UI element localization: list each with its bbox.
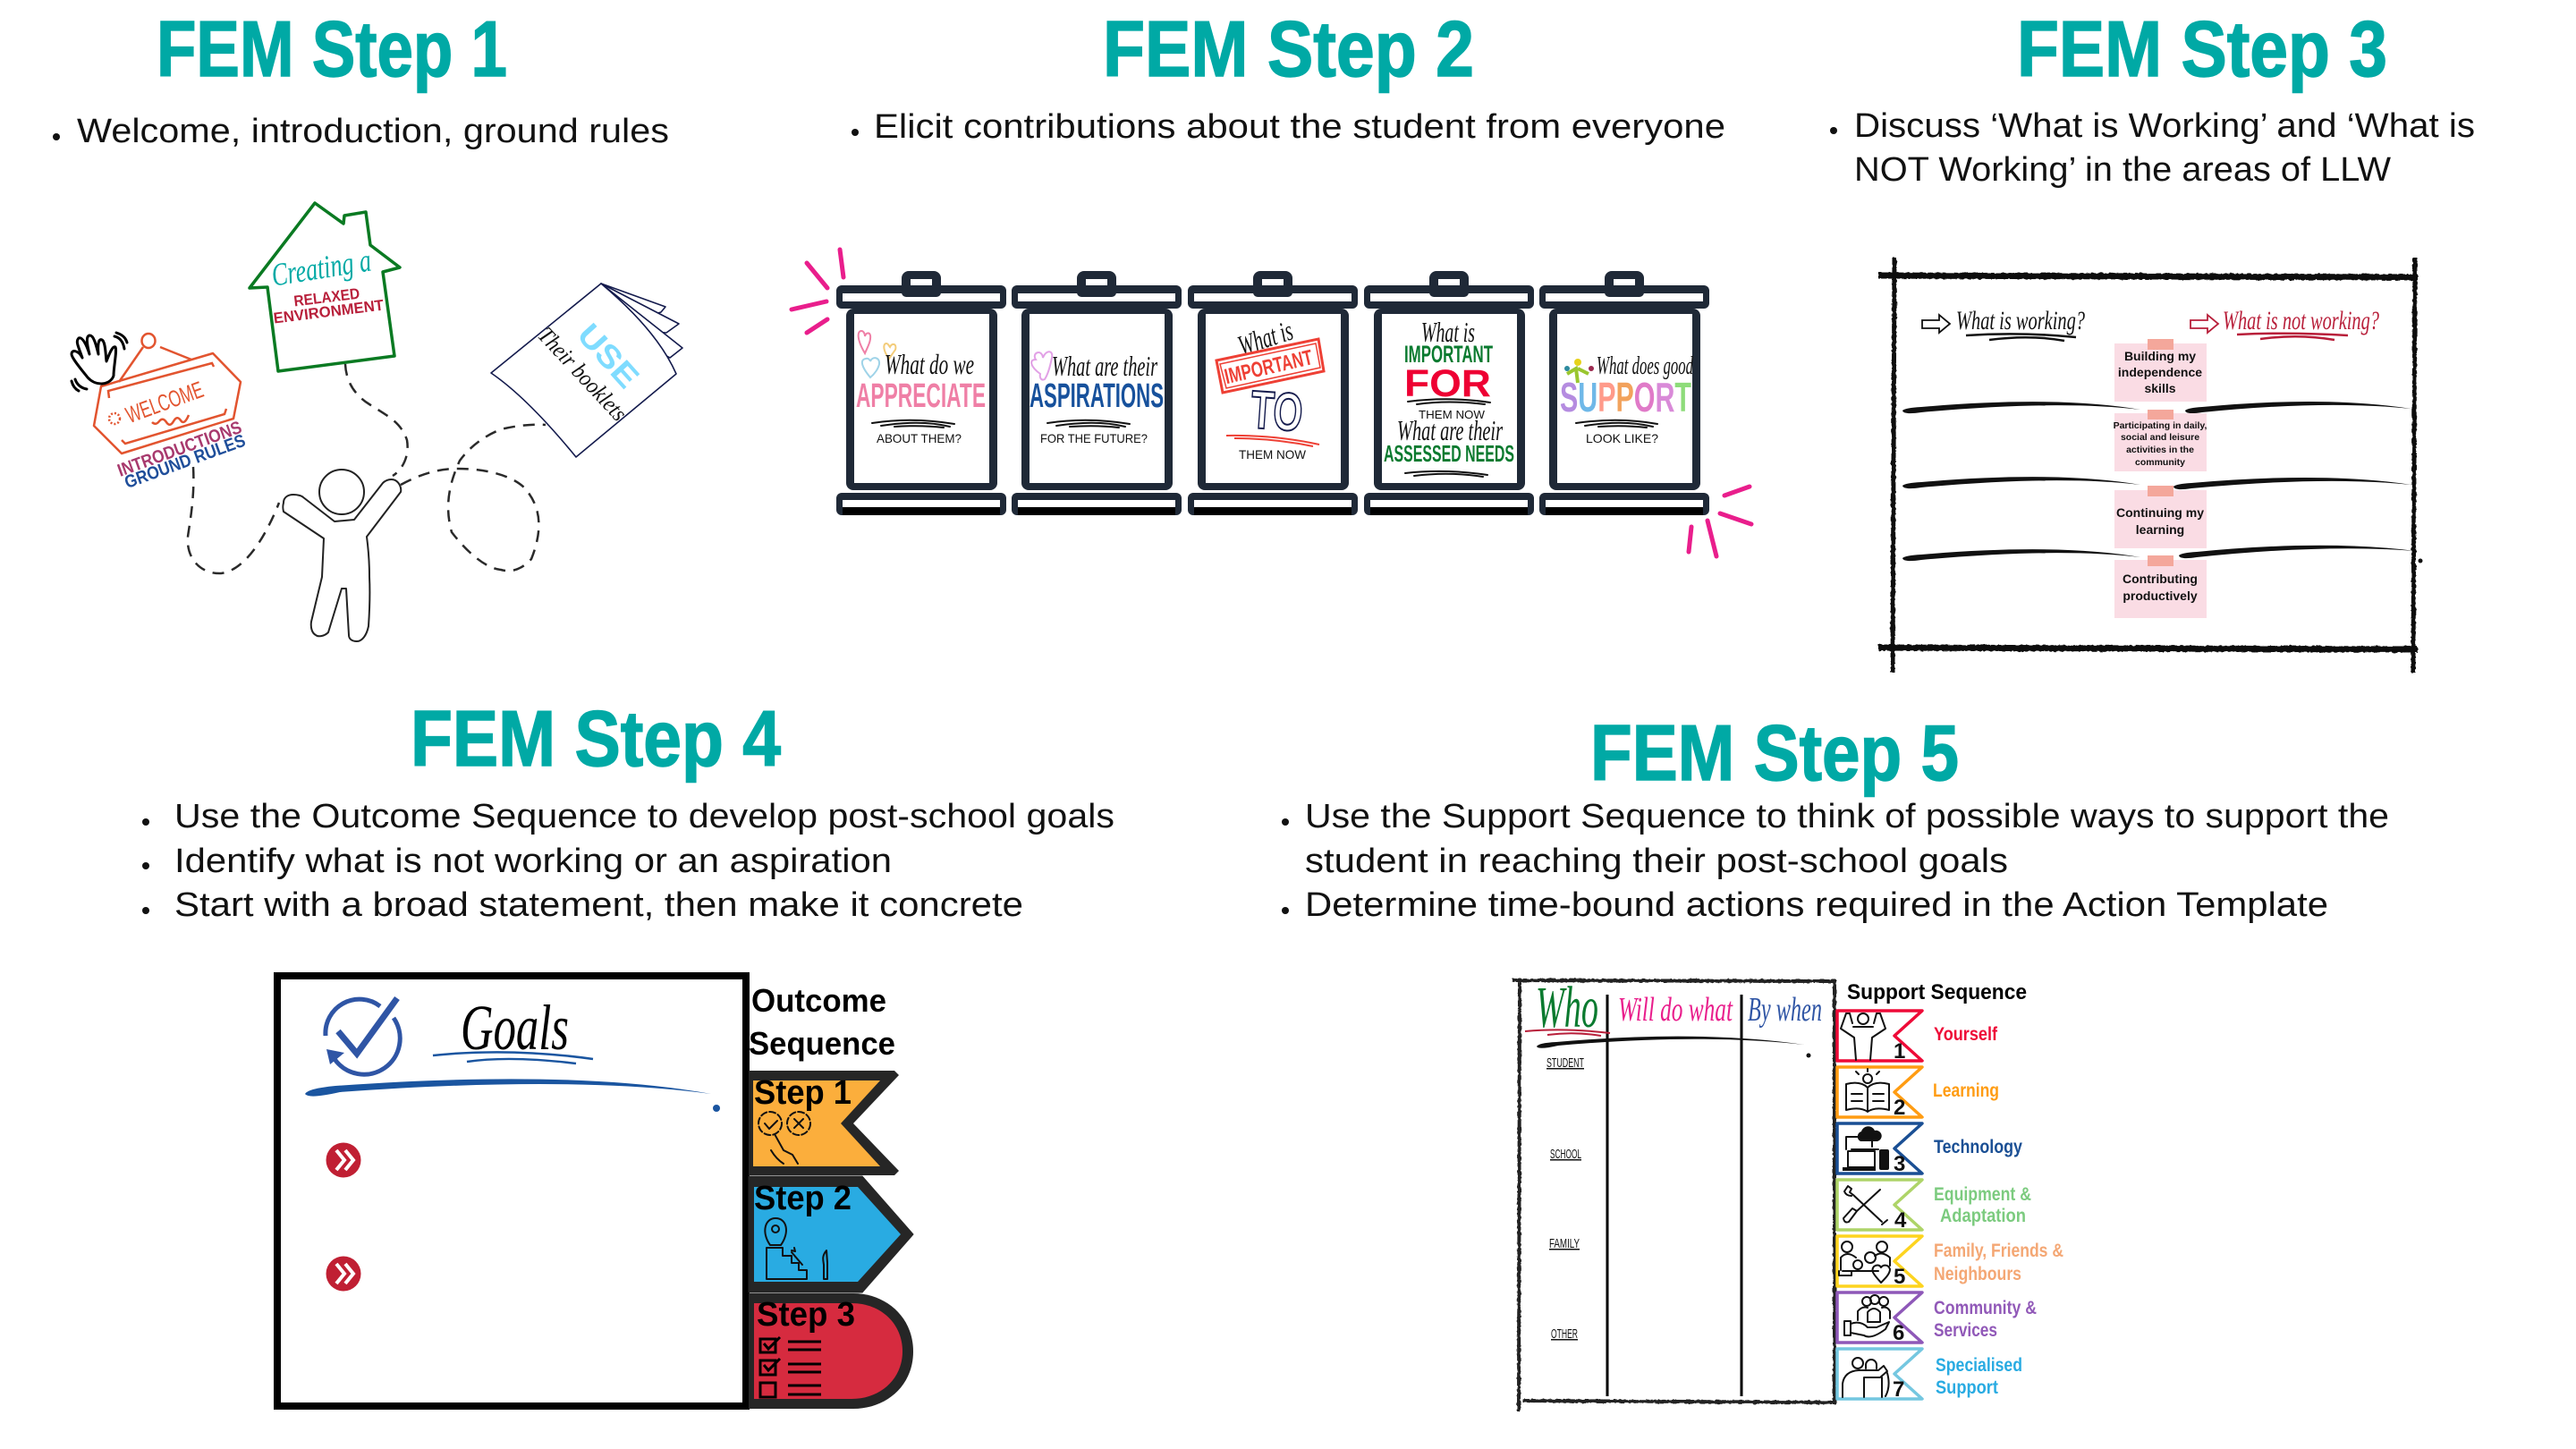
text: step 5 bullets: student in reaching their post-school goals [1305, 843, 2008, 880]
icon: check circle [326, 998, 400, 1074]
jar 1: appreciate: ABOUT THEM? [877, 431, 962, 445]
heading: outcome sequence: Sequence [749, 1025, 895, 1062]
jar 3: important to [1188, 271, 1358, 515]
jar 2: aspirations: What are their [1052, 350, 1157, 382]
icon: person [283, 470, 401, 641]
jar 4: important for: What are their [1397, 414, 1503, 446]
jar 1: appreciate: APPRECIATE [856, 377, 986, 415]
jar 1: appreciate: What do we [885, 348, 974, 380]
icon: welcome sign [94, 334, 248, 493]
jar 5: support: What does good [1597, 352, 1694, 380]
swoosh lines [1902, 402, 2422, 564]
note: participating: Participating in daily, [2114, 420, 2207, 431]
panel: what is working frame [1878, 258, 2422, 673]
heading: who [1525, 975, 1610, 1040]
title: FEM Step 5: FEM Step 5 [1590, 708, 1959, 797]
text: step 3 bullet [1830, 107, 2475, 189]
icon: booklet: Their booklets [533, 322, 632, 426]
flag 7: specialised support: Specialised [1936, 1355, 2022, 1376]
flag 1: yourself [1837, 1011, 1998, 1063]
flag 2: learning: 2 [1894, 1096, 1905, 1120]
note: participating [2114, 410, 2207, 471]
jar 4: important for: FOR [1404, 362, 1491, 405]
heading: outcome sequence [749, 982, 895, 1062]
flag 6: community: Services [1934, 1320, 1997, 1341]
text: step 2 bullet: Elicit contributions about the student from everyone [874, 108, 1725, 146]
title: FEM Step 4: FEM Step 4 [411, 694, 781, 783]
flag 4: equipment: 4 [1894, 1208, 1907, 1233]
flag 4: equipment: Adaptation [1940, 1206, 2026, 1226]
flag 6: community [1837, 1292, 2037, 1345]
flag 2: learning [1837, 1067, 1999, 1120]
icon: welcome sign: INTRODUCTIONS [115, 418, 244, 481]
jar 3: important to: TO [1249, 379, 1305, 443]
text: step 4 bullets: Identify what is not working or an aspiration [174, 843, 892, 880]
icon: red bullet 2 [326, 1256, 361, 1292]
jar 3: important to: What is [1234, 314, 1297, 361]
flag 7: specialised support [1837, 1349, 2022, 1402]
icon: waving hand [72, 333, 127, 391]
flag 5: family: 5 [1894, 1265, 1905, 1289]
note: contributing: Contributing [2123, 572, 2198, 586]
flag 6: community: Community & [1934, 1298, 2037, 1318]
jar 4: important for: IMPORTANT [1404, 341, 1493, 368]
banner: step 2 [749, 1176, 913, 1292]
illustration: step 1 journey [72, 203, 682, 641]
flag 3: technology: 3 [1894, 1152, 1905, 1176]
heading: goals: Goals [461, 992, 569, 1063]
heading: who: Who [1536, 975, 1598, 1040]
text: step 5 bullets: Use the Support Sequence to think of possible ways to support the [1305, 798, 2389, 835]
jar 2: aspirations: ASPIRATIONS [1030, 377, 1164, 415]
row labels: FAMILY [1549, 1236, 1580, 1251]
text: step 5 bullets: Determine time-bound actions required in the Action Template [1305, 886, 2328, 924]
note: participating: activities in the [2126, 445, 2194, 455]
jar 2: aspirations [1012, 271, 1182, 515]
heading: what is not working [2190, 306, 2379, 340]
text: step 4 bullets: Use the Outcome Sequence to develop post-school goals [174, 798, 1114, 835]
flag 6: community: 6 [1893, 1321, 1904, 1345]
note: contributing: productively [2123, 589, 2198, 603]
flag 3: technology: Technology [1934, 1137, 2022, 1157]
icon: booklet [491, 284, 682, 457]
swoosh: table [1537, 1037, 1810, 1057]
title: FEM Step 1: FEM Step 1 [157, 4, 507, 93]
banner: step 3 [749, 1293, 913, 1409]
icon: house: Creating a [269, 242, 374, 293]
flag 7: specialised support: 7 [1893, 1377, 1904, 1402]
note: continuing learning: Continuing my [2116, 505, 2204, 520]
icon: welcome sign: GROUND RULES [122, 431, 248, 493]
flag 5: family: Family, Friends & [1934, 1241, 2063, 1261]
icon: house: RELAXED [292, 285, 360, 309]
flag 5: family: Neighbours [1934, 1264, 2021, 1284]
decoration: pink rays [792, 250, 1751, 556]
banner: step 3: Step 3 [757, 1296, 855, 1334]
path: dashed trails [188, 364, 546, 573]
jar 5: support: LOOK LIKE? [1586, 431, 1658, 445]
heading: by when: By when [1748, 991, 1822, 1029]
jar 3: important to: THEM NOW [1239, 447, 1307, 462]
flag 3: technology [1837, 1123, 2022, 1176]
text: step 3 bullet: Discuss ‘What is Working’ and ‘What is [1854, 107, 2475, 145]
row labels: SCHOOL [1550, 1147, 1581, 1162]
flag 4: equipment: Equipment & [1934, 1184, 2031, 1205]
text: step 4 bullets [142, 798, 1114, 924]
swoosh: goals [305, 1079, 720, 1112]
heading: support sequence: Support Sequence [1847, 980, 2027, 1004]
text: step 5 bullets [1282, 798, 2389, 924]
title: FEM Step 3: FEM Step 3 [2017, 4, 2387, 93]
jar 2: aspirations: FOR THE FUTURE? [1040, 431, 1148, 445]
flag 7: specialised support: Support [1936, 1377, 1998, 1398]
flag 4: equipment [1837, 1180, 2031, 1233]
jars row [836, 271, 1709, 515]
heading: what is not working: What is not working? [2223, 306, 2379, 335]
icon: house: ENVIRONMENT [273, 296, 386, 327]
heading: outcome sequence: Outcome [751, 982, 886, 1019]
jar 4: important for [1364, 271, 1534, 515]
banner: step 1: Step 1 [754, 1074, 852, 1112]
heading: what is working [1922, 306, 2085, 341]
icon: house [250, 203, 400, 371]
note: contributing [2114, 555, 2207, 618]
flags: support sequence [1837, 1011, 2063, 1402]
row labels: OTHER [1551, 1326, 1578, 1342]
flag 5: family [1837, 1236, 2063, 1289]
jar 3: important to: IMPORTANT [1223, 345, 1315, 389]
flag 2: learning: Learning [1933, 1080, 1999, 1101]
banner: step 1 [749, 1071, 899, 1175]
panel: goals [277, 976, 746, 1406]
jar 4: important for: ASSESSED NEEDS [1384, 440, 1514, 467]
jar 5: support [1539, 271, 1709, 515]
icon: booklet: USE [571, 316, 647, 395]
heading: what is working: What is working? [1956, 306, 2085, 335]
flag 1: yourself: 1 [1894, 1039, 1905, 1063]
title: FEM Step 2: FEM Step 2 [1103, 4, 1474, 93]
jar 4: important for: What is [1421, 316, 1475, 348]
text: step 4 bullets: Start with a broad statement, then make it concrete [174, 886, 1023, 924]
icon: welcome sign: WELCOME [123, 376, 207, 428]
note: building independence [2114, 339, 2207, 402]
jar 1: appreciate [836, 271, 1006, 515]
note: participating: community [2135, 457, 2185, 468]
note: building independence: Building my [2124, 349, 2196, 363]
note: building independence: skills [2144, 381, 2176, 395]
note: participating: social and leisure [2121, 432, 2199, 443]
text: step 3 bullet: NOT Working’ in the areas of LLW [1854, 151, 2391, 189]
note: building independence: independence [2118, 365, 2202, 379]
icon: red bullet 1 [326, 1143, 361, 1177]
text: step 1 bullet: Welcome, introduction, ground rules [77, 113, 669, 150]
jar 5: support: SUPPORT [1560, 374, 1691, 420]
panel: action template table [1513, 975, 1836, 1411]
jar 4: important for: THEM NOW [1419, 408, 1486, 421]
banner: step 2: Step 2 [754, 1180, 852, 1217]
heading: will do what: Will do what [1618, 991, 1733, 1029]
flag 1: yourself: Yourself [1934, 1024, 1998, 1045]
note: continuing learning: learning [2136, 522, 2184, 537]
note: continuing learning [2114, 486, 2207, 548]
row labels [1546, 1055, 1584, 1342]
row labels: STUDENT [1546, 1055, 1584, 1071]
